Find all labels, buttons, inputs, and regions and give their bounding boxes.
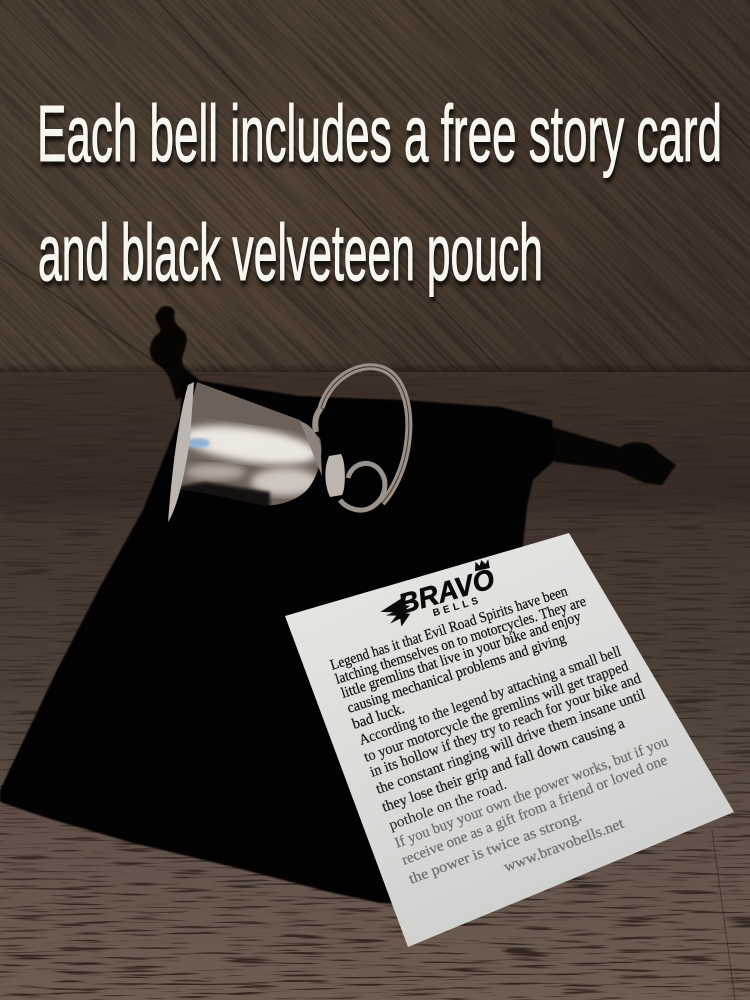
pouch right drawstring and knot <box>545 425 676 485</box>
card story text: the constant ringing will drive them insane until <box>374 687 648 798</box>
velveteen pouch <box>0 306 676 905</box>
brand logo: BRAVO <box>395 563 498 620</box>
wooden wall background <box>0 0 750 374</box>
story card <box>285 533 734 947</box>
card story text: little gremlins that live in your bike and enjoy <box>339 609 583 702</box>
pouch left drawstring and knot <box>150 306 205 400</box>
brand logo: BELLS <box>432 595 483 619</box>
brand logo <box>375 558 500 633</box>
logo crown <box>473 558 491 572</box>
card story text: in its hollow if they try to reach for your bike and <box>368 671 644 781</box>
small jump ring <box>340 463 385 510</box>
card story text: If you buy your own the power works, but if you <box>393 734 671 852</box>
card story text: Legend has it that Evil Road Spirits have been <box>328 583 570 674</box>
split key ring <box>315 367 409 503</box>
bell rim <box>168 382 194 522</box>
pouch body <box>0 378 555 905</box>
card story text: causing mechanical problems and giving <box>345 631 568 717</box>
card story text: receive one as a gift from a friend or loved one <box>400 752 670 869</box>
bell collar <box>325 454 345 497</box>
card story text: www.bravobells.net <box>502 816 627 876</box>
card story text: pothole on the road. <box>387 777 509 834</box>
card story text: latching themselves on to motorcycles. They are <box>333 594 588 688</box>
bell body <box>176 382 321 510</box>
card story text: the power is twice as strong. <box>407 809 584 888</box>
bell dome edge <box>300 421 322 476</box>
card story text: bad luck. <box>350 701 407 733</box>
card story text: to your motorcycle the gremlins will get trapped <box>362 658 631 766</box>
card sheet <box>285 533 734 947</box>
heading <box>37 89 722 297</box>
card story text: According to the legend by attaching a small bell <box>357 644 623 749</box>
card story text <box>328 583 671 888</box>
silver bell <box>168 367 409 522</box>
logo flames <box>378 595 415 631</box>
wooden floor background <box>0 372 750 1000</box>
card story text: they lose their grip and fall down causing a <box>380 716 627 816</box>
